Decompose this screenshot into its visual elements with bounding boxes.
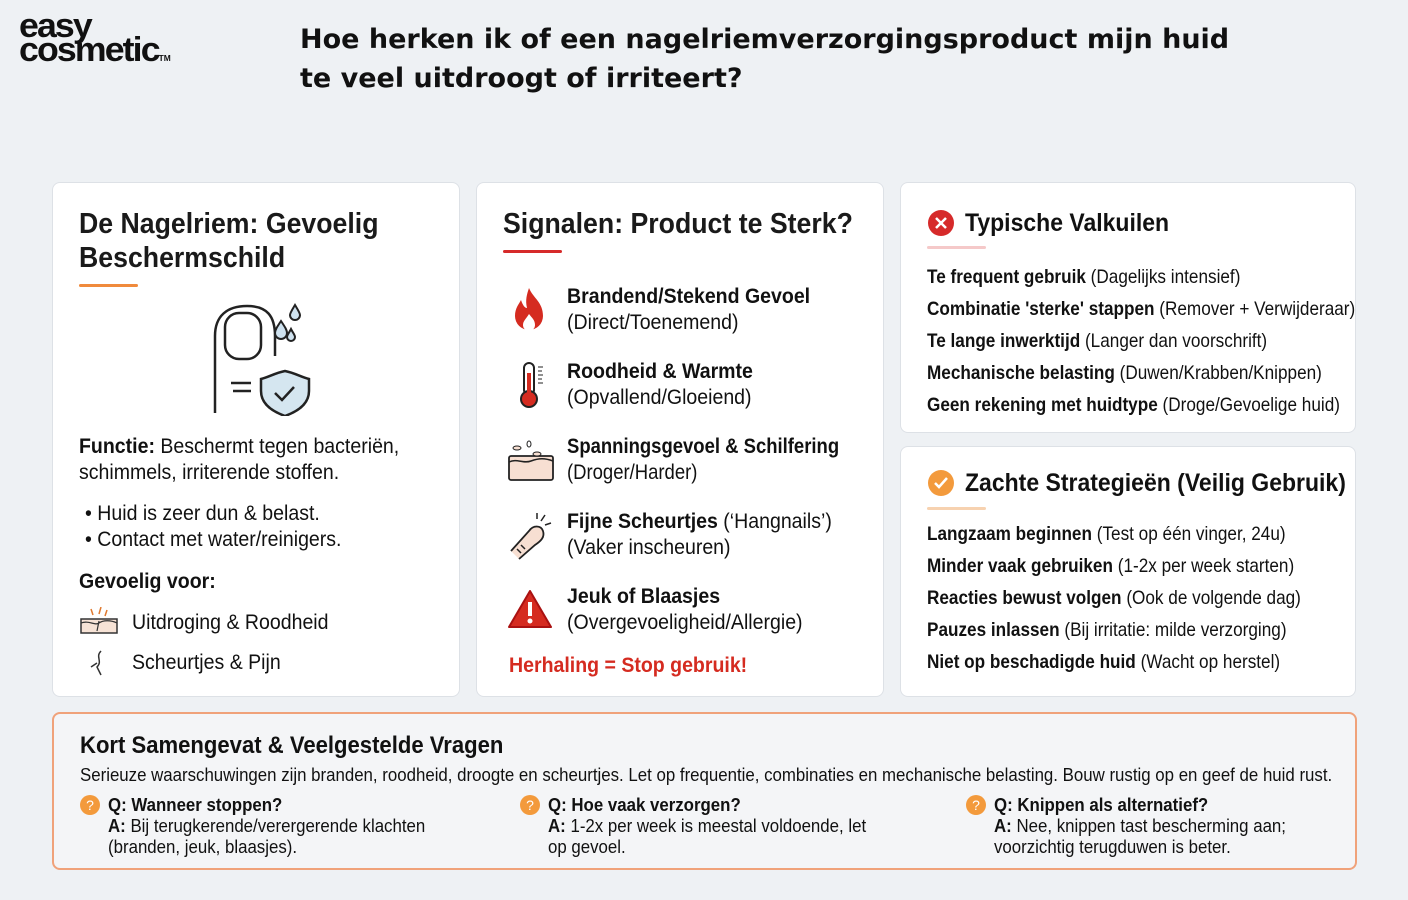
signal: spanning — [508, 435, 839, 484]
signal: branden: (Direct/Toenemend) — [567, 311, 738, 334]
signal: spanning: Spanningsgevoel & Schilfering — [567, 435, 839, 458]
signal: spanning: (Droger/Harder) — [567, 461, 697, 484]
list: valkuilen: Geen rekening met huidtype (Droge/Gevoelige huid) — [927, 394, 1340, 416]
bullets — [85, 502, 341, 551]
text: functie: schimmels, irriterende stoffen. — [79, 461, 339, 484]
faq 3: Q: Knippen als alternatief? — [994, 794, 1208, 815]
signal: roodheid: Roodheid & Warmte — [567, 360, 753, 383]
summary text: Serieuze waarschuwingen zijn branden, roodheid, droogte en scheurtjes. Let op frequentie, combinaties en mechanische belasting. Bouw rustig op en geef de huid rust. — [80, 764, 1332, 785]
signal: scheurtjes: (Vaker inscheuren) — [567, 536, 731, 559]
faq 3 — [966, 794, 1286, 857]
heading: Typische Valkuilen — [965, 209, 1169, 237]
signal: jeuk: Jeuk of Blaasjes — [567, 585, 720, 608]
panel: valkuilen — [900, 182, 1356, 433]
list: strategieen: Minder vaak gebruiken (1-2x per week starten) — [927, 555, 1294, 577]
logo — [19, 7, 171, 69]
list: strategieen: Pauzes inlassen (Bij irritatie: milde verzorging) — [927, 619, 1287, 641]
faq 1: Q: Wanneer stoppen? — [108, 794, 282, 815]
signal: scheurtjes — [510, 510, 832, 560]
icon: check — [928, 470, 954, 496]
faq 1: ? — [86, 797, 94, 813]
faq 1: A: Bij terugkerende/verergerende klachten — [108, 815, 425, 836]
faq 1 — [80, 794, 425, 857]
list: strategieen: Niet op beschadigde huid (Wacht op herstel) — [927, 651, 1280, 673]
item: uitdroging — [80, 607, 329, 634]
item: uitdroging: Uitdroging & Roodheid — [132, 611, 329, 634]
signal: roodheid — [520, 360, 753, 409]
heading — [79, 208, 379, 274]
warning text: Herhaling = Stop gebruik! — [509, 654, 747, 677]
panel: strategieen — [900, 446, 1356, 697]
signal: branden: Brandend/Stekend Gevoel — [567, 285, 810, 308]
list: strategieen: Langzaam beginnen (Test op één vinger, 24u) — [927, 523, 1286, 545]
faq 2: A: 1-2x per week is meestal voldoende, let — [548, 815, 866, 836]
list: valkuilen: Mechanische belasting (Duwen/Krabben/Knippen) — [927, 362, 1322, 384]
faq 3: ? — [972, 797, 980, 813]
logo: cosmeticTM — [19, 31, 171, 69]
title — [300, 24, 1229, 94]
heading: Signalen: Product te Sterk? — [503, 208, 853, 240]
heading: Zachte Strategieën (Veilig Gebruik) — [965, 469, 1346, 497]
icon: cross — [928, 210, 954, 236]
faq 2: Q: Hoe vaak verzorgen? — [548, 794, 741, 815]
faq 2: ? — [526, 797, 534, 813]
heading: Kort Samengevat & Veelgestelde Vragen — [80, 732, 503, 759]
heading: De Nagelriem: Gevoelig — [79, 208, 379, 240]
title: Hoe herken ik of een nagelriemverzorgingsproduct mijn huid — [300, 24, 1229, 55]
panel: samenvatting — [52, 712, 1357, 870]
signal: jeuk — [508, 585, 803, 634]
list: strategieen — [927, 523, 1301, 673]
text: functie: Functie: Beschermt tegen bacteriën, — [79, 435, 399, 458]
signal: scheurtjes: Fijne Scheurtjes (‘Hangnails’) — [567, 510, 832, 533]
signal: branden — [515, 285, 810, 334]
faq 3: A: Nee, knippen tast bescherming aan; — [994, 815, 1286, 836]
subheading: Gevoelig voor: — [79, 570, 216, 593]
faq 3: voorzichtig terugduwen is beter. — [994, 836, 1231, 857]
list: valkuilen: Te frequent gebruik (Dagelijks intensief) — [927, 266, 1240, 288]
text: functie — [79, 435, 399, 484]
faq 1: (branden, jeuk, blaasjes). — [108, 836, 297, 857]
list: strategieen: Reacties bewust volgen (Ook de volgende dag) — [927, 587, 1301, 609]
item: scheurtjes: Scheurtjes & Pijn — [132, 651, 281, 674]
bullets: • Huid is zeer dun & belast. — [85, 502, 320, 525]
list: valkuilen: Combinatie 'sterke' stappen (Remover + Verwijderaar) — [927, 298, 1355, 320]
panel: signalen — [476, 182, 884, 697]
list: valkuilen — [927, 266, 1355, 416]
logo: easy — [19, 7, 91, 45]
faq 2 — [520, 794, 866, 857]
signal: roodheid: (Opvallend/Gloeiend) — [567, 386, 752, 409]
panel: nagelriem — [52, 182, 460, 697]
list: valkuilen: Te lange inwerktijd (Langer dan voorschrift) — [927, 330, 1267, 352]
icon: finger with shield — [214, 303, 310, 416]
bullets: • Contact met water/reinigers. — [85, 528, 341, 551]
faq 2: op gevoel. — [548, 836, 626, 857]
signal: jeuk: (Overgevoeligheid/Allergie) — [567, 611, 803, 634]
title: te veel uitdroogt of irriteert? — [300, 63, 743, 94]
heading: Beschermschild — [79, 242, 285, 274]
